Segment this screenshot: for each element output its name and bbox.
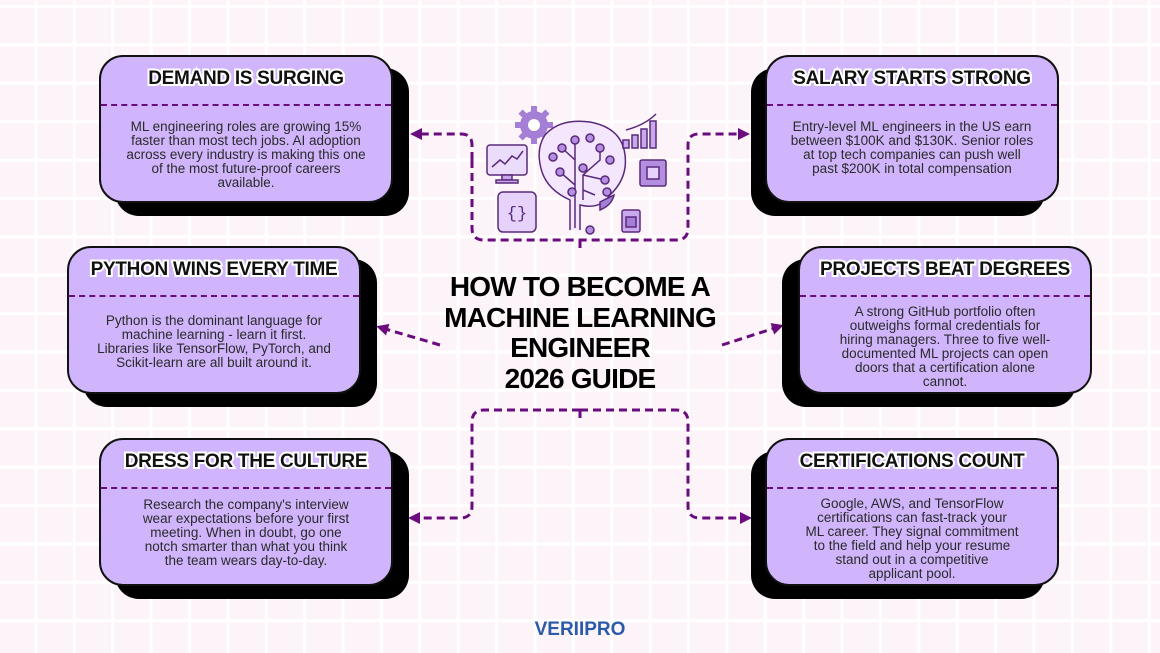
gear <box>515 106 553 144</box>
text: cannot. <box>923 374 967 389</box>
text: faster than most tech jobs. AI adoption <box>131 133 361 148</box>
monitor <box>487 145 527 183</box>
code box <box>498 192 536 232</box>
text <box>126 119 366 190</box>
text: between $100K and $130K. Senior roles <box>791 133 1033 148</box>
panel: dress <box>99 438 409 599</box>
text <box>840 304 1050 389</box>
title: MACHINE LEARNING <box>444 302 716 332</box>
text <box>791 119 1033 176</box>
text <box>97 313 331 370</box>
bar chart <box>623 114 656 148</box>
text: machine learning - learn it first. <box>122 327 306 342</box>
text: Python is the dominant language for <box>106 313 322 328</box>
chip <box>640 160 666 186</box>
text: Scikit-learn are all built around it. <box>116 355 312 370</box>
text: documented ML projects can open <box>842 346 1048 361</box>
panel: salary <box>751 55 1059 216</box>
text: hiring managers. Three to five well- <box>840 332 1050 347</box>
text: Google, AWS, and TensorFlow <box>820 496 1004 511</box>
panel: projects <box>782 246 1092 407</box>
title: 2026 GUIDE <box>505 362 655 394</box>
text: ML engineering roles are growing 15% <box>131 119 361 134</box>
footer brand: VERIIPRO <box>535 619 625 640</box>
text: stand out in a competitive <box>835 552 989 567</box>
text: wear expectations before your first <box>143 511 349 526</box>
title: HOW TO BECOME A <box>450 271 710 302</box>
text: doors that a certification alone <box>855 360 1035 375</box>
text: notch smarter than what you think <box>145 539 347 554</box>
panel: certifications <box>751 438 1059 599</box>
brain <box>539 121 625 234</box>
text: Entry-level ML engineers in the US earn <box>793 119 1031 134</box>
heading: SALARY STARTS STRONG <box>793 68 1031 89</box>
text: Research the company's interview <box>143 497 349 512</box>
code box: {} <box>507 205 527 224</box>
text: to the field and help your resume <box>814 538 1010 553</box>
heading: PROJECTS BEAT DEGREES <box>820 259 1070 280</box>
text <box>142 497 350 568</box>
heading: DEMAND IS SURGING <box>148 68 344 89</box>
text: of the most future-proof careers <box>151 161 341 176</box>
text: past $200K in total compensation <box>812 161 1012 176</box>
heading: DRESS FOR THE CULTURE <box>125 451 367 472</box>
title: ENGINEER <box>510 332 650 363</box>
panel: python <box>67 246 377 407</box>
text: available. <box>217 175 275 190</box>
text: across every industry is making this one <box>126 147 366 162</box>
text: the team wears day-to-day. <box>165 553 327 568</box>
heading: CERTIFICATIONS COUNT <box>800 451 1024 472</box>
text: meeting. When in doubt, go one <box>150 525 342 540</box>
title <box>444 271 716 394</box>
text: Libraries like TensorFlow, PyTorch, and <box>97 341 331 356</box>
text: ML career. They signal commitment <box>805 524 1019 539</box>
panel: demand is surging <box>99 55 409 216</box>
text: at top tech companies can push well <box>803 147 1021 162</box>
text <box>805 496 1019 581</box>
text: A strong GitHub portfolio often <box>855 304 1035 319</box>
small chip <box>622 210 640 232</box>
text: outweighs formal credentials for <box>850 318 1040 333</box>
heading: PYTHON WINS EVERY TIME <box>91 259 337 280</box>
text: certifications can fast-track your <box>817 510 1007 525</box>
text: applicant pool. <box>868 566 956 581</box>
